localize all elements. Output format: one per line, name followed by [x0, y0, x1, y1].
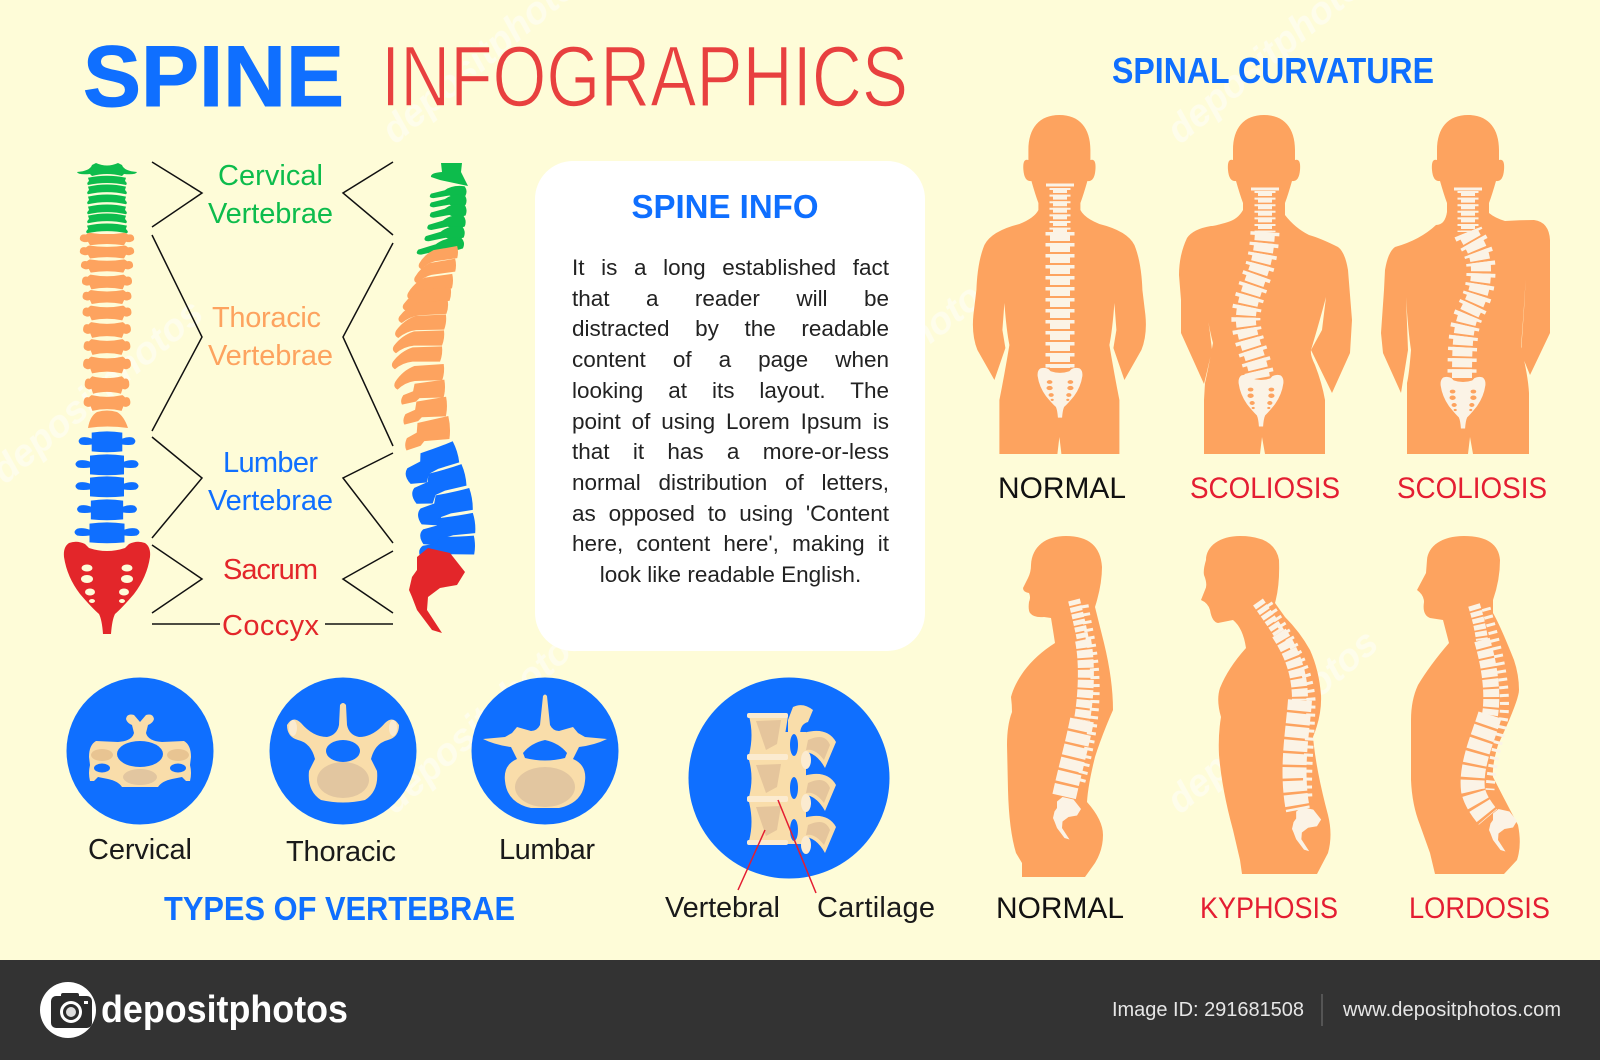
vertebra labels: Sacrum: [223, 554, 318, 586]
footer bar: [0, 960, 1600, 1060]
vertebra labels: Vertebrae: [208, 198, 333, 230]
vertebra type labels: Cervical: [88, 834, 192, 866]
title: INFOGRAPHICS: [381, 29, 908, 125]
panel text block: It is a long established fact: [572, 255, 889, 280]
heading: types of vertebrae: TYPES OF VERTEBRAE: [164, 890, 515, 927]
panel text block: that it has a more-or-less: [572, 439, 889, 464]
image id: Image ID: 291681508: [1112, 999, 1304, 1021]
silhouette: [1007, 536, 1113, 877]
site url: www.depositphotos.com: [1342, 999, 1561, 1021]
silhouette: [1381, 115, 1550, 454]
figure labels, top row: [998, 472, 1547, 505]
side view spine: [392, 163, 476, 633]
icon: camera logo: [40, 982, 96, 1038]
figure labels, top row: SCOLIOSIS: [1397, 472, 1547, 505]
sacrum and coccyx, side: [409, 548, 465, 633]
silhouette: [1411, 536, 1520, 874]
lumbar vertebrae, side: [401, 441, 476, 566]
panel: spine info: [535, 161, 925, 651]
figure: normal side: [1007, 536, 1113, 877]
figure: normal back: [973, 115, 1146, 454]
panel text block: normal distribution of letters,: [572, 470, 889, 495]
spine: [1473, 605, 1517, 852]
panel text block: content of a page when: [572, 347, 889, 372]
heading: spinal curvature: SPINAL CURVATURE: [1112, 50, 1434, 91]
panel heading: SPINE INFO: [631, 188, 819, 225]
figure: lordosis side: [1411, 536, 1520, 874]
panel text block: [572, 255, 889, 587]
panel text block: distracted by the readable: [572, 316, 889, 341]
callout lines: vertebral and cartilage: [738, 800, 816, 893]
vertebra labels: [208, 160, 333, 642]
panel text block: looking at its layout. The: [572, 378, 889, 403]
front view spine: [64, 163, 150, 634]
vertebra labels: Lumber: [223, 447, 318, 479]
panel text block: here, content here', making it: [572, 531, 889, 556]
vertebra type labels: Cartilage: [817, 892, 935, 924]
vertebra type labels: Thoracic: [286, 836, 396, 868]
figure labels, bottom row: NORMAL: [996, 892, 1124, 925]
panel text block: look like readable English.: [600, 562, 861, 587]
panel text block: that a reader will be: [572, 286, 889, 311]
panel text block: point of using Lorem Ipsum is: [572, 409, 889, 434]
vertebra labels: Vertebrae: [208, 485, 333, 517]
watermarks: depositphotos: [373, 615, 596, 822]
vertebra labels: Coccyx: [222, 610, 320, 642]
vertebra type labels: Lumbar: [499, 834, 595, 866]
title: [83, 29, 908, 125]
watermarks: depositphotos: [775, 263, 1007, 457]
spine: [1441, 189, 1485, 429]
icon: vertebral column segment: [688, 678, 890, 878]
figure labels, top row: NORMAL: [998, 472, 1126, 505]
cervical vertebrae, front: [77, 163, 137, 233]
thoracic vertebrae, side: [392, 246, 460, 451]
spine: [1258, 602, 1321, 851]
figure: scoliosis back, right curve: [1381, 115, 1550, 454]
vertebra type labels: [88, 834, 935, 924]
silhouette: [1201, 536, 1330, 874]
vertebra labels: Vertebrae: [208, 340, 333, 372]
spine: [1239, 189, 1283, 427]
figure: kyphosis side: [1201, 536, 1330, 874]
cervical vertebrae, side: [415, 163, 468, 257]
figure labels, bottom row: LORDOSIS: [1409, 892, 1550, 925]
panel text block: as opposed to using 'Content: [572, 501, 889, 526]
icon: lumbar vertebra: [472, 678, 618, 824]
vertebra labels: Thoracic: [212, 302, 321, 334]
title: SPINE: [83, 29, 344, 125]
spine: [1038, 185, 1082, 418]
thoracic vertebrae, front: [80, 233, 134, 428]
icon: cervical vertebra: [66, 678, 214, 824]
lumbar vertebrae, front: [75, 431, 139, 543]
bracket lines: [152, 162, 393, 624]
silhouette: [973, 115, 1146, 454]
sacrum, front: [64, 542, 150, 634]
silhouette: [1179, 115, 1352, 454]
watermarks: depositphotos: [1159, 621, 1386, 822]
figure: scoliosis back, left curve: [1179, 115, 1352, 454]
logo wordmark: depositphotos: [101, 989, 348, 1031]
figure labels, top row: SCOLIOSIS: [1190, 472, 1340, 505]
icon: thoracic vertebra: [270, 678, 416, 824]
figure labels, bottom row: [996, 892, 1550, 925]
vertebra labels: Cervical: [218, 160, 323, 192]
figure labels, bottom row: KYPHOSIS: [1200, 892, 1338, 925]
vertebra type labels: Vertebral: [665, 892, 780, 924]
watermarks: [0, 0, 1386, 822]
spine: [1053, 600, 1095, 840]
